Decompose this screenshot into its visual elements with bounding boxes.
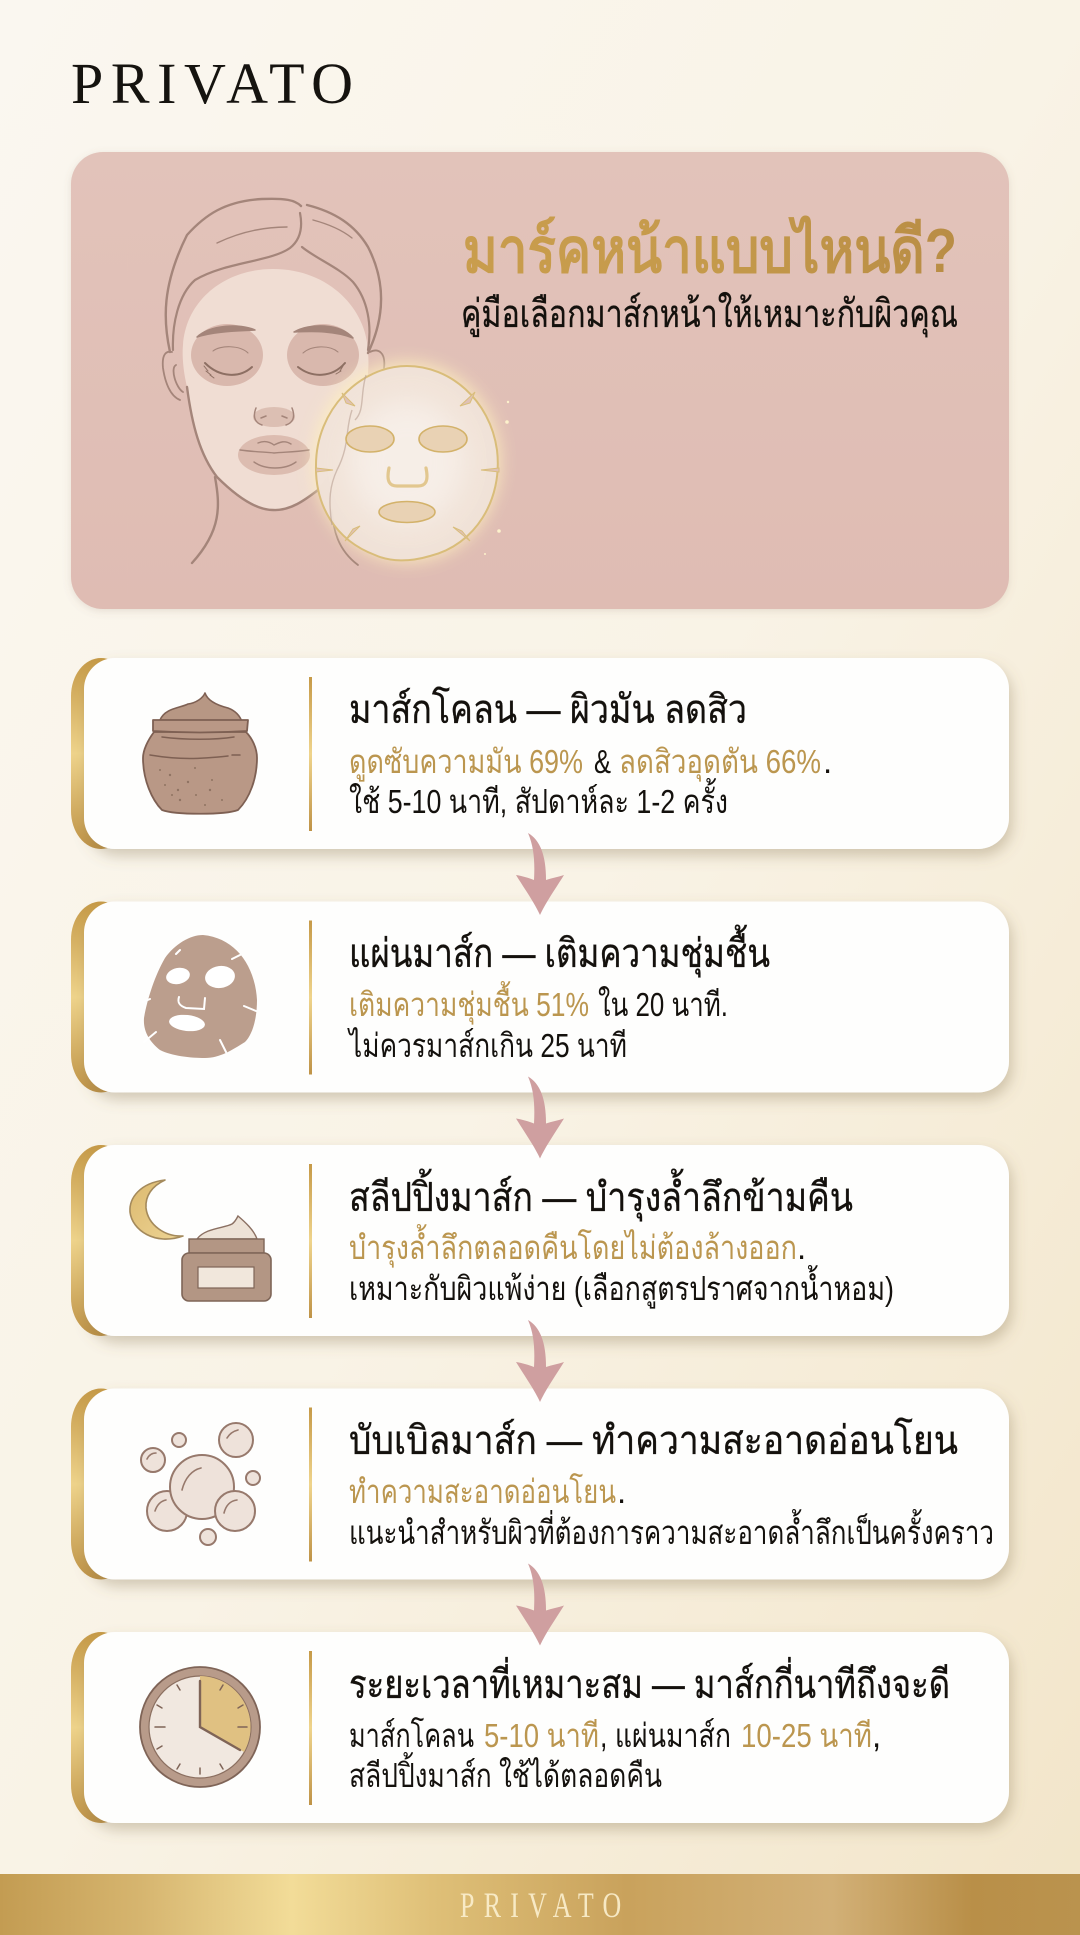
panel: sleeping mask: [71, 1145, 1009, 1336]
arrow 3: [516, 1320, 564, 1402]
illustration: woman's face: [163, 199, 384, 565]
illustration: glowing sheet mask: [313, 361, 509, 563]
icon: bubbles: [141, 1423, 260, 1545]
durations line: 5-10 นาที: [484, 1717, 599, 1754]
panel: hero: [71, 152, 1009, 609]
durations line: 10-25 นาที: [741, 1717, 872, 1754]
durations line: , แผ่นมาส์ก: [600, 1717, 731, 1754]
panel: sheet mask: [71, 902, 1009, 1092]
durations line: ,: [872, 1717, 881, 1754]
heading: สลีปปิ้งมาส์ก — บำรุงล้ำลึกข้ามคืน: [349, 1168, 853, 1222]
arrow 1: [516, 833, 564, 915]
usage text: ใช้ 5-10 นาที, สัปดาห์ละ 1-2 ครั้ง: [349, 778, 728, 820]
highlight stats: ทำความสะอาดอ่อนโยน: [349, 1473, 616, 1510]
divider: [309, 920, 312, 1074]
highlight stats: .: [617, 1473, 626, 1510]
highlight stats: .: [797, 1229, 806, 1266]
divider: [309, 1164, 312, 1318]
highlight stats: .: [823, 743, 832, 780]
highlight stats: ลดสิวอุดตัน 66%: [619, 743, 821, 782]
usage text: ไม่ควรมาส์กเกิน 25 นาที: [347, 1027, 627, 1064]
hero subtitle: คู่มือเลือกมาส์กหน้าให้เหมาะกับผิวคุณ: [461, 292, 958, 338]
footer brand: PRIVATO: [460, 1885, 621, 1925]
icon: moon and cream jar: [130, 1180, 271, 1301]
brand logo: PRIVATO: [71, 51, 353, 116]
highlight stats: [349, 981, 728, 1025]
divider: [309, 1408, 312, 1562]
heading: ระยะเวลาที่เหมาะสม — มาส์กกี่นาทีถึงจะดี: [349, 1657, 950, 1707]
durations line: มาส์กโคลน: [349, 1717, 474, 1754]
arrow 2: [516, 1076, 564, 1158]
highlight stats: ดูดซับความมัน 69%: [349, 743, 583, 782]
heading: แผ่นมาส์ก — เติมความชุ่มชื้น: [349, 924, 770, 978]
arrow 4: [516, 1564, 564, 1646]
highlight stats: [349, 743, 832, 782]
icon: clock: [140, 1667, 260, 1787]
usage text: สลีปปิ้งมาส์ก ใช้ได้ตลอดคืน: [349, 1752, 662, 1794]
icon: clay mask jar: [143, 693, 257, 814]
hero title: มาร์คหน้าแบบไหนดี?: [463, 215, 957, 286]
panel: bubble mask: [71, 1388, 1009, 1580]
panel: clay mask: [71, 658, 1009, 849]
highlight stats: ใน 20 นาที.: [598, 986, 728, 1023]
footer bar: [0, 1874, 1080, 1935]
divider: [309, 1651, 312, 1805]
panel: timing: [71, 1632, 1009, 1823]
highlight stats: บำรุงล้ำลึกตลอดคืนโดยไม่ต้องล้างออก: [349, 1224, 797, 1268]
durations line: [349, 1717, 881, 1754]
heading: มาส์กโคลน — ผิวมัน ลดสิว: [349, 687, 747, 732]
usage text: เหมาะกับผิวแพ้ง่าย (เลือกสูตรปราศจากน้ำหอม): [349, 1265, 894, 1309]
highlight stats: &: [594, 743, 611, 780]
highlight stats: เติมความชุ่มชื้น 51%: [349, 981, 589, 1025]
heading: บับเบิลมาส์ก — ทำความสะอาดอ่อนโยน: [349, 1418, 958, 1463]
icon: sheet mask: [143, 935, 257, 1058]
divider: [309, 677, 312, 831]
